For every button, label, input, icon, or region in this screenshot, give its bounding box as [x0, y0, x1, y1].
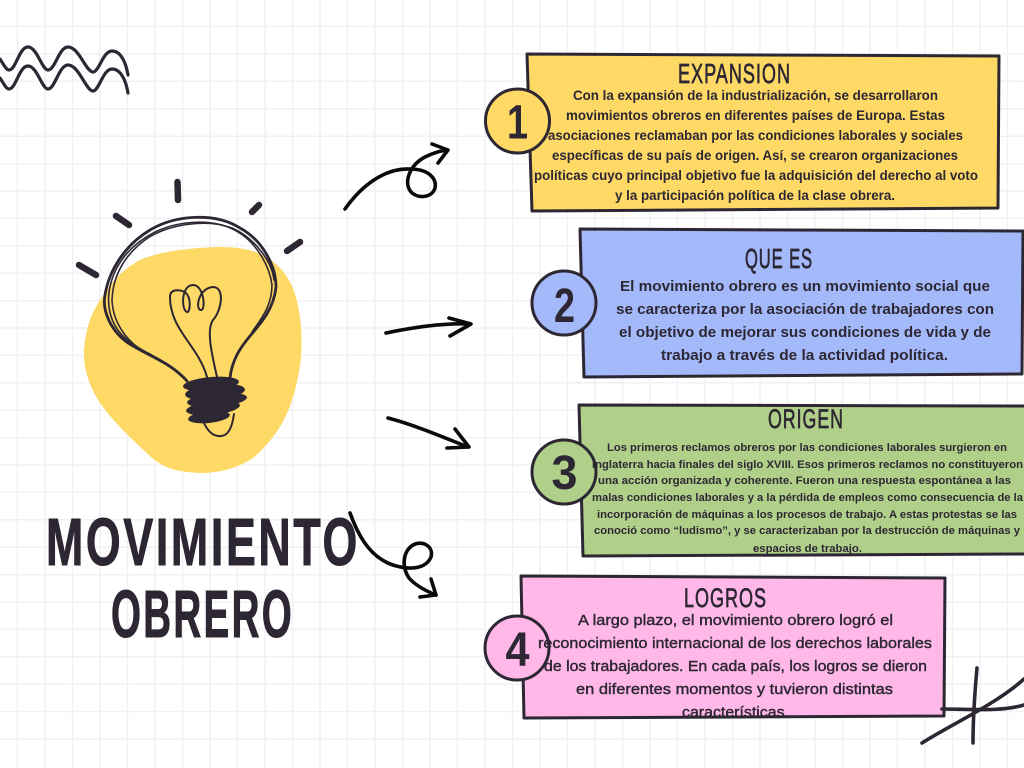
body text [534, 87, 978, 203]
body text: en diferentes momentos y tuvieron distintas [576, 681, 893, 698]
body text: malas condiciones laborales y a la pérdida de empleos como consecuencia de la [592, 492, 1024, 504]
body text: espacios de trabajo. [753, 543, 862, 555]
number badge 2: 2 [554, 280, 575, 333]
heading: QUE ES [745, 243, 813, 274]
body text: se caracteriza por la asociación de trabajadores con [616, 301, 994, 318]
panel background [527, 54, 999, 211]
icon: light bulb [79, 182, 302, 473]
bulb outline [104, 217, 276, 381]
number badge 1: 1 [507, 96, 528, 150]
number badge 4 [485, 616, 549, 680]
body text: políticas cuyo principal objetivo fue la adquisición del derecho al voto [534, 167, 978, 183]
heading: LOGROS [684, 583, 767, 613]
cross scribble decoration [922, 668, 1024, 743]
panel: que es [532, 229, 1023, 377]
light rays [79, 182, 300, 275]
panel background [579, 405, 1024, 556]
bulb base [182, 375, 247, 425]
heading: EXPANSION [678, 58, 791, 89]
body text: Inglaterra hacia finales del siglo XVIII. Esos primeros reclamos no constituyeron [592, 459, 1023, 471]
panel: expansion [486, 54, 999, 211]
arrow: to logros [350, 513, 436, 597]
body text: y la participación política de la clase obrera. [615, 187, 895, 203]
filament [170, 285, 221, 377]
arrow: to que es [386, 318, 471, 336]
body text [538, 612, 932, 721]
body text: A largo plazo, el movimiento obrero logró el [578, 612, 893, 629]
body text: movimientos obreros en diferentes países de Europa. Estas [566, 107, 945, 123]
yellow blob [84, 247, 302, 473]
title [46, 505, 360, 652]
body text: el objetivo de mejorar sus condiciones de vida y de [619, 324, 991, 341]
number badge 4: 4 [506, 624, 530, 677]
body text: reconocimiento internacional de los derechos laborales [538, 635, 932, 652]
arrow: to expansion [345, 144, 448, 209]
body text: trabajo a través de la actividad política. [661, 347, 948, 364]
body text: Los primeros reclamos obreros por las condiciones laborales surgieron en [607, 442, 1007, 454]
body text: características. [682, 704, 789, 721]
body text [592, 442, 1024, 555]
body text [616, 278, 994, 364]
title: MOVIMIENTO [46, 505, 360, 580]
panel: origen [532, 404, 1024, 556]
body text: de los trabajadores. En cada país, los logros se dieron [544, 658, 927, 675]
number badge 3 [532, 440, 596, 504]
panel: logros [485, 576, 945, 721]
number badge 3: 3 [552, 447, 578, 500]
body text: El movimiento obrero es un movimiento social que [620, 278, 990, 295]
body text: asociaciones reclamaban por las condiciones laborales y sociales [548, 127, 963, 143]
body text: específicas de su país de origen. Así, se crearon organizaciones [552, 147, 958, 163]
body text: conoció como “ludismo”, y se caracterizaban por la destrucción de máquinas y [594, 525, 1021, 537]
number badge 2 [532, 271, 596, 335]
body text: incorporación de máquinas a los procesos de trabajo. A estas protestas se las [597, 509, 1017, 521]
arrow: to origen [388, 418, 469, 448]
panel background [580, 229, 1023, 377]
squiggle decoration [0, 47, 128, 93]
heading: ORIGEN [768, 404, 844, 434]
title: OBRERO [111, 577, 294, 652]
body text: una acción organizada y coherente. Fueron una respuesta espontánea a las [598, 475, 1011, 487]
body text: Con la expansión de la industrialización, se desarrollaron [573, 87, 938, 103]
bulb tip [203, 414, 234, 436]
number badge 1 [486, 89, 550, 153]
panel background [521, 576, 945, 718]
